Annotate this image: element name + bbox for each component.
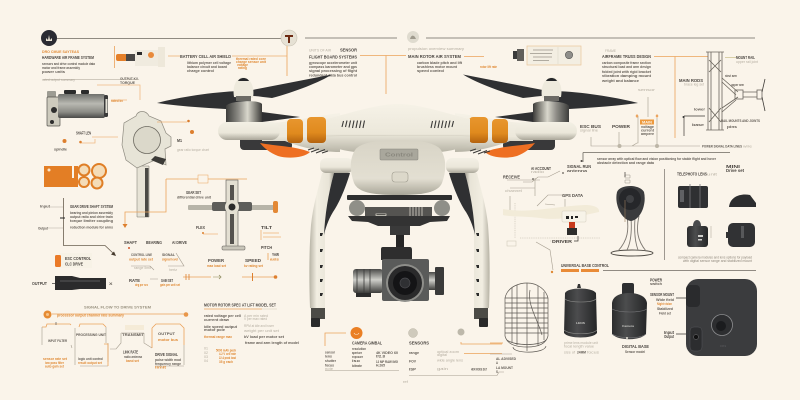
icon: motor cylinder (47, 90, 108, 126)
flow labels middle (124, 240, 264, 287)
flow labels middle: signal level (162, 258, 178, 262)
icon: battery module (114, 46, 165, 68)
bottom section: camera spec 1: shutter (325, 359, 337, 363)
bottom section: camera spec 1: exposure (352, 355, 363, 359)
camera (353, 259, 444, 302)
text block: propulsion: MAIN ROTOR AIR SYSTEM (408, 54, 461, 59)
bottom section: camera spec 1: CAMERA GIMBAL (352, 340, 382, 346)
labels: gear: gear ratio torque chart (177, 148, 209, 152)
text: body labels: Output (664, 334, 674, 339)
flow box 4: pulse width mod (155, 358, 181, 362)
text block: flight controller: compass barometer and gps (309, 65, 357, 69)
icon: black handle bar: X (109, 282, 113, 286)
text block: intro: sensors and drive control module data (42, 62, 96, 66)
icon: cream circuit strip: DRIVER (552, 239, 573, 244)
flow box 4: DRIVE SIGNAL (155, 352, 178, 357)
text: body labels: POWER (650, 278, 662, 282)
labels: motor: SHAFT LEN (76, 130, 91, 136)
text block: battery (168, 46, 287, 76)
text block: airframe: folded joint with rigid bracket (602, 70, 652, 74)
diagram: control labels: POWER SIGNAL DATA LINES (702, 144, 742, 148)
flow labels middle: POWER (208, 258, 225, 263)
text block: specification: MOTOR ROTOR SPEC AT LIFT MODEL SET (204, 302, 276, 308)
labels: truss frame: brace leg set (684, 82, 704, 86)
flow box 4: frequency range (155, 362, 181, 366)
drone legs (309, 158, 490, 327)
text block: intro: HARDWARE AIR FRAME SYSTEM (42, 55, 94, 60)
labels: truss frame: MOUNT RAIL (736, 55, 755, 60)
flow labels middle: max load set (207, 264, 227, 268)
flow box 1: INPUT FILTER (48, 339, 67, 343)
labels: truss frame: upper arm (731, 83, 744, 87)
text block: specification: 5000 mAh pack (216, 348, 237, 352)
flow box 1: auto gain set (45, 364, 65, 368)
flow labels middle: CONTROL LINE (131, 253, 152, 257)
text block: propulsion: carbon blade pitch and lift (417, 61, 463, 65)
drone bay button (392, 172, 408, 182)
diagram: control labels: ampere (641, 132, 654, 136)
text block: flight controller (309, 48, 358, 78)
bottom section: camera spec 1: bitrate (352, 364, 362, 368)
gimbal stem (381, 226, 412, 260)
labels: truss frame: RAIL MOUNTS AND JOINTS (721, 119, 760, 123)
text: lens caption: prime lens module unit (564, 341, 598, 345)
header labels: components (677, 164, 744, 176)
labels: truss frame: strut arm (725, 74, 737, 78)
diagram: truss frame (706, 52, 765, 130)
icon: black handle bar (32, 276, 113, 290)
icon: camera body: ON (720, 344, 726, 348)
drone bay label: Control (385, 152, 414, 158)
flow box 2: PROCESSING UNIT (76, 333, 107, 337)
labels: truss frame: MAIN RODS (679, 78, 703, 83)
arrows: axis scales (183, 273, 277, 281)
text: body labels: Wide field (656, 298, 674, 302)
diagram: signal flow labels: GPS DATA (562, 193, 584, 198)
notes near cage (490, 343, 516, 374)
text block: airframe: vibration damping mount (602, 74, 652, 78)
text: lens caption: size of (564, 350, 575, 354)
text block: specification: thermal range max (204, 335, 233, 339)
labels: cross shaft: axis (270, 258, 279, 262)
text: body labels: Field set (659, 312, 672, 316)
icon: connector module (513, 46, 581, 65)
flow labels middle: AI DRIVE (172, 240, 187, 245)
text block: gear spec: bearing and pinion assembly (70, 211, 113, 215)
icon: lens cylinder: LENS (576, 321, 585, 325)
icon: cream circuit strip (503, 205, 599, 244)
flow labels middle: SHAFT (124, 240, 137, 245)
flow box 1: sensor rate set (43, 357, 68, 361)
text: body labels: Stabilized (657, 307, 673, 311)
text block: gear spec: Input (40, 204, 51, 208)
flow labels middle: gain per unit set (160, 283, 180, 287)
flow labels middle: SIGNAL (162, 253, 176, 257)
flow box 4 (152, 324, 184, 370)
bottom section: camera spec 1: note (325, 367, 333, 371)
flow labels middle: output rate set (129, 258, 154, 262)
flow chart header: processor output channel rate summary (57, 314, 125, 318)
notes near cage: LA MOUNT (496, 366, 514, 370)
icon: header badge right (407, 31, 419, 43)
icon: ESC label: ESC CONTROL (65, 256, 91, 261)
bracket line with arrow (48, 198, 116, 256)
flow box 1 (42, 322, 72, 368)
drone arms, motors and rotors (157, 74, 638, 158)
text block: sensor note: sensor array with optical flow and vision positioning for stable flight and hover (597, 157, 717, 161)
flow box 3: band set (126, 359, 140, 363)
drone bay label (380, 149, 418, 160)
bottom section: camera spec 2: HDR MODE SET (471, 368, 487, 372)
labels: webcam (625, 172, 630, 222)
labels: cross shaft: TILT (261, 225, 272, 230)
icon: cross shaft (188, 180, 278, 250)
labels: truss frame: pins (727, 125, 737, 129)
text block: specification: 02 (204, 351, 208, 355)
notes near cage: S (496, 370, 498, 374)
text block: battery: balance circuit and board (187, 65, 227, 69)
icon: ESC label (55, 253, 92, 268)
text block: specification: 22 A peak load (219, 356, 236, 360)
diagram: control labels: sensor (638, 88, 656, 92)
diagram: control labels: MAIN (642, 120, 653, 124)
flow box 3 (110, 325, 152, 363)
bottom section: camera spec 1: lens (325, 354, 332, 358)
labels: cross shaft: YAW (272, 252, 279, 257)
text block: battery: voltage (237, 63, 248, 67)
labels: motor (54, 99, 124, 152)
icon: header badge left (41, 30, 57, 46)
icon: lens barrel (612, 283, 647, 339)
text: lens caption (564, 341, 599, 354)
text block: flight controller: signal processing of flight (309, 69, 358, 73)
text block: airframe: AIRFRAME TRUSS DESIGN (602, 54, 652, 59)
flow labels middle: range limit (134, 266, 151, 270)
text block: specification: weight per unit set (244, 329, 279, 333)
text block: specification: 01 (204, 346, 208, 350)
text block: sensor note: obstacle detection and range data (597, 161, 655, 165)
bottom section: camera spec 1: iso (352, 359, 361, 363)
text: body labels: SENSOR MOUNT (650, 292, 674, 297)
text block: specification: frame and arm length of model (245, 341, 299, 345)
flow labels middle: GAIN SET (161, 278, 173, 283)
bottom section: camera spec 1: aperture (352, 351, 362, 355)
diagram: signal flow labels: RECEIVE (503, 174, 520, 180)
bottom section: camera spec 2 (403, 328, 504, 384)
text: barrel caption: Sensor model (625, 350, 645, 354)
text block: battery: lithium polymer cell voltage (187, 61, 231, 65)
text block: specification: V per max rated (244, 317, 267, 321)
labels: motor: rated kv (111, 99, 124, 103)
diagram: control labels: voltage (641, 125, 654, 129)
text block: flight controller: FLIGHT BOARD SYSTEMS (309, 54, 357, 60)
text: component caption: with digital sensor range and stabilized mount (683, 259, 752, 263)
text block: gear spec: output ratio and drive train (70, 215, 113, 219)
flow box 4: OUTPUT (158, 332, 176, 336)
icon: orange gear block (44, 164, 106, 188)
text: component caption (678, 256, 752, 263)
orange frame with arrow (122, 175, 247, 228)
text block: gear spec: GEAR DRIVE SHAFT SYSTEM (70, 204, 113, 209)
text block: specification: kV load per motor set (244, 335, 285, 339)
text block: specification: 03 (204, 355, 208, 359)
text block: flight controller: gyroscope accelerometer unit (309, 61, 358, 65)
text block: specification: A per min rated (244, 314, 268, 318)
icon: lens cylinder (564, 284, 597, 338)
labels: orange frame: GEAR SET (186, 190, 201, 195)
text: lens caption: focus (587, 350, 599, 354)
text: lens caption: focal length value (564, 344, 594, 348)
text block: specification: 35 g each (219, 360, 234, 364)
header labels: components: TELEPHOTO LENS (677, 172, 707, 176)
text block: specification (204, 302, 299, 364)
flow box 1: low pass filter (45, 361, 64, 365)
labels: motor: spindle (54, 148, 67, 152)
diagram: control labels: signal line (580, 128, 598, 132)
labels: truss frame: lower (694, 108, 706, 112)
text block: intro: OUTPUT KV (120, 77, 139, 81)
text block: flight controller: UNITS OF AIR (309, 48, 331, 52)
text block: intro: rated output summary (42, 78, 75, 82)
flow labels middle: deg per sec (135, 283, 148, 287)
flow labels middle: BEARING (146, 240, 162, 245)
drone central bay (351, 140, 445, 195)
text: body labels: switch (650, 282, 662, 286)
diagram: signal flow labels: radio (531, 170, 544, 174)
icon: ESC label: CLC DRIVE (65, 262, 83, 266)
flow labels middle: hertz (169, 268, 177, 272)
diagram: signal flow labels: SIGNAL RUN (567, 164, 592, 169)
diagram: signal flow labels: antenna (567, 169, 588, 173)
text block: specification: idle speed output (204, 325, 238, 329)
icon: wire cage (505, 283, 548, 352)
text block: intro: DRO CMUE SAYTEAS (42, 50, 79, 54)
text: body labels (650, 278, 686, 339)
header labels: components: MINI (726, 164, 740, 169)
text block: battery: thermal rated core (236, 57, 266, 61)
text block: flight controller: SENSOR (340, 48, 358, 52)
text block: airframe: structural load and arm design (602, 65, 651, 69)
text: barrel caption: DIGITAL BASE (622, 344, 649, 349)
text: body labels: Night vision (657, 302, 672, 306)
bottom section: camera spec 1: sensor (325, 350, 335, 354)
bottom section: camera spec 2: range (409, 351, 419, 355)
bottom section: camera spec 2: gain (437, 367, 448, 371)
text block: gear spec: torque limiter coupling (70, 219, 113, 223)
flow labels middle: RATE (129, 278, 140, 283)
text block: intro: power units (42, 70, 65, 74)
labels: ESC note (536, 242, 756, 273)
text block: propulsion: rotor lift rate (480, 65, 497, 69)
text block: propulsion: propulsion overview summary (408, 47, 464, 51)
text block: battery: charge control (187, 69, 214, 73)
diagram: control labels (580, 88, 752, 148)
leader line: airframe (654, 56, 708, 138)
flow box 3: TRANSMIT (122, 333, 145, 337)
top header rules (57, 37, 755, 40)
icon: small gimbal (729, 194, 756, 207)
text block: airframe: weight and balance (601, 79, 639, 83)
gimbal plate (347, 195, 452, 226)
text block: airframe (601, 49, 652, 83)
labels: ESC note: UNIVERSAL BASE CONTROL (561, 263, 609, 268)
bottom section: camera spec 1: 12 MP RAW IMG (376, 360, 398, 364)
text block: sensor note (580, 152, 730, 165)
drone (157, 74, 638, 327)
labels: cross shaft: FLEX (196, 225, 206, 230)
bottom section: camera spec 1: f/2.8 (376, 354, 385, 358)
icon: small tube camera (687, 220, 711, 247)
bottom section: camera spec 1: H.265 (376, 364, 385, 368)
icon: camera body (686, 279, 757, 356)
labels: truss frame: upper rail joint (736, 60, 758, 64)
flow chart header (44, 306, 188, 318)
icon: gear housing (122, 112, 171, 217)
icon: header badge centre (281, 30, 297, 46)
text block: specification: rated voltage per cell (204, 314, 241, 318)
drone vents (308, 120, 490, 154)
labels: orange frame: differential drive unit (177, 196, 212, 200)
text block: propulsion (408, 47, 497, 73)
header labels: components: Drive set (726, 168, 744, 173)
text: body labels: Input (664, 330, 674, 335)
text: component caption: compact camera modules and lens options for payload (678, 256, 752, 260)
bottom section: camera spec 2: ISP (409, 368, 417, 372)
text block: battery: rating (238, 66, 248, 70)
drone shell (326, 104, 470, 153)
text block: specification: current draw (204, 318, 229, 322)
text block: specification: motor pole (204, 328, 225, 332)
flow box 3: LINK RATE (123, 350, 138, 354)
bottom section: camera spec 1 (325, 327, 399, 371)
flow box 4: motor bus (158, 338, 178, 342)
bottom section: camera spec 2: wide angle lens (437, 358, 463, 362)
diagram: control labels: ESC BUS (580, 124, 601, 129)
flow labels middle: kv rating set (244, 264, 264, 268)
diagram: control labels: wire (743, 144, 752, 148)
drone seam (326, 134, 470, 137)
labels: orange frame (177, 190, 212, 200)
text block: intro (42, 50, 139, 85)
flow labels middle: SPEED (245, 258, 262, 263)
icon: black handle bar: OUTPUT (32, 281, 47, 286)
text block: specification: 04 (204, 359, 208, 363)
text block: specification: RPM at idle and hover (244, 324, 275, 328)
labels: gear (157, 120, 209, 152)
text block: airframe: carbon composite frame section (602, 61, 651, 65)
icon: telephoto lens (678, 184, 708, 208)
bottom section: camera spec 2: SENSORS (409, 340, 429, 346)
text block: flight controller: redundant data bus control (309, 74, 357, 78)
text block: gear spec: reduction module for arms (70, 226, 113, 230)
text block: battery: charge sensor unit (236, 60, 267, 64)
leader lines: intro (43, 80, 140, 100)
text block: intro: motor and frame assembly (42, 66, 80, 70)
bottom section: camera spec 2: ref (403, 380, 408, 384)
text block: intro: TORQUE (120, 81, 136, 85)
bottom section: camera spec 2: optical zoom (437, 350, 459, 354)
text block: gear spec: Output (38, 226, 49, 230)
labels: gear: M1 (177, 138, 182, 143)
header labels: components: unit (707, 172, 717, 176)
bottom section: camera spec 1: focus (325, 364, 334, 368)
notes near cage: AL ADVISED (496, 357, 516, 361)
text block: propulsion: brushless motor mount (417, 65, 458, 69)
flow chart header: SIGNAL FLOW TO DRIVE SYSTEM (84, 306, 151, 310)
diagram: signal flow labels: channel (505, 189, 522, 193)
text block: propulsion: speed control (417, 69, 444, 73)
labels: truss frame: base (692, 123, 704, 127)
labels: cross shaft (196, 225, 281, 262)
text block: battery: BATTERY CELL AIR SHIELD (180, 54, 232, 59)
text: barrel caption (622, 344, 649, 354)
bottom section: camera spec 1: 4K VIDEO 60 (376, 351, 398, 355)
icon: lens barrel: Camera (622, 324, 634, 328)
labels: truss frame (679, 55, 760, 136)
notes near cage: A (496, 361, 498, 365)
diagram: signal flow labels (503, 164, 600, 246)
flow box 2: result output set (78, 361, 103, 365)
labels: cross shaft: PITCH (261, 245, 273, 250)
vertical divider (664, 169, 666, 260)
text block: airframe: FRAME (605, 49, 617, 53)
leader line: flight controller (360, 56, 406, 94)
diagram: control labels: POWER (612, 124, 631, 129)
bottom section: camera spec 2: digital (437, 353, 447, 357)
diagram: signal flow labels: AI ACCOUNT (531, 166, 551, 171)
flow box 2: logic unit control (78, 357, 103, 361)
icon: webcam on stand (611, 186, 653, 256)
flow box 2 (75, 324, 108, 366)
text block: gear spec (38, 204, 113, 230)
bottom section: camera spec 1: resolution (352, 347, 366, 351)
text block: specification: 4.2 V cell rate (219, 352, 236, 356)
text: lens caption: 24MM (577, 350, 586, 354)
icon: small box camera (726, 223, 755, 247)
flow box 4: limit (155, 366, 167, 370)
flow box 3: radio antenna (124, 355, 143, 359)
diagram: control labels: current (641, 128, 655, 132)
bottom section: camera spec 2: FOV (409, 360, 417, 364)
